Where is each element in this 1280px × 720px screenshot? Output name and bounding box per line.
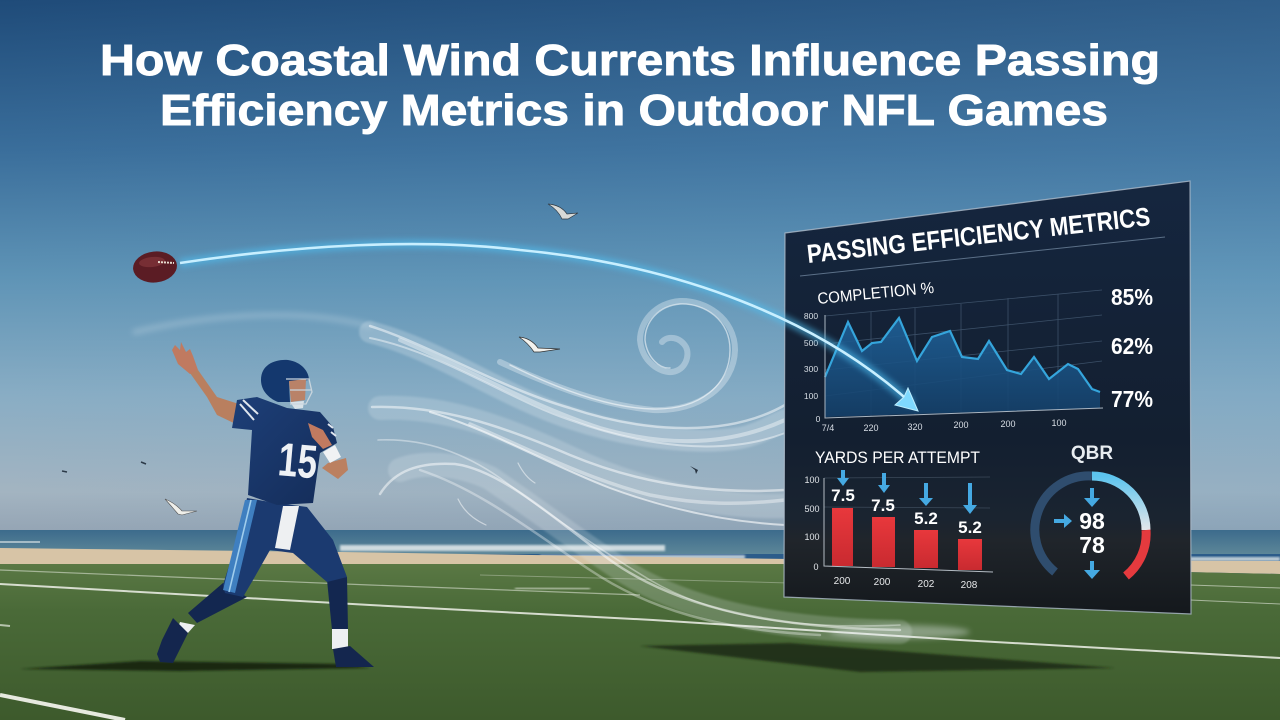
y axis labels: 100: [804, 532, 820, 542]
forearm: [322, 458, 348, 479]
chart gridlines: [825, 290, 1102, 416]
y axis labels: 800: [804, 311, 818, 321]
gauge dark arc: [1035, 476, 1092, 572]
icon: distant bird: [690, 466, 698, 474]
x axis labels: 7/4: [822, 423, 834, 433]
chart axes: [824, 478, 993, 572]
background: grass field with yard lines: [0, 564, 1280, 720]
panel divider: [800, 237, 1165, 276]
y axis labels: [804, 475, 820, 572]
wind stream 2: [372, 407, 785, 525]
chart title: COMPLETION %: [817, 280, 935, 308]
y axis labels: 100: [804, 391, 818, 401]
torso jersey: [232, 397, 337, 505]
icon: distant bird dots: [62, 462, 146, 472]
shoe left: [157, 618, 188, 663]
completion values: 85%: [1111, 284, 1153, 310]
gauge light arc: [1092, 476, 1146, 530]
completion values: [1111, 284, 1153, 412]
bar values: 7.5: [831, 486, 855, 505]
y axis labels: 100: [804, 475, 820, 485]
trajectory arrow: [180, 244, 918, 411]
birds: [62, 204, 698, 515]
background: ocean: [0, 530, 1280, 561]
front leg: [327, 577, 348, 630]
y axis labels: 300: [804, 364, 818, 374]
icon: gauge arrows: [1054, 488, 1100, 579]
player shadow on field: [20, 661, 370, 671]
completion values: 62%: [1111, 333, 1153, 359]
x axis labels: 200: [874, 577, 891, 588]
x axis labels: 200: [953, 420, 969, 430]
sock right: [332, 629, 348, 649]
panel background: [784, 181, 1191, 614]
chart area: [825, 318, 1100, 417]
bar values: 5.2: [914, 509, 938, 528]
wind currents: [135, 301, 970, 639]
chart title: YARDS PER ATTEMPT: [815, 448, 980, 467]
gauge title: QBR: [1071, 443, 1113, 464]
icon: football: [132, 249, 178, 285]
gauge values: 98: [1079, 508, 1105, 534]
gauge values: 78: [1079, 532, 1105, 558]
bar values: 7.5: [871, 496, 895, 515]
y axis labels: 500: [804, 338, 818, 348]
y axis labels: 500: [804, 504, 820, 514]
x axis labels: 200: [834, 576, 851, 587]
hand: [172, 342, 198, 374]
wind stream 3: [378, 440, 970, 639]
helmet: [261, 360, 309, 402]
chin strap: [290, 401, 304, 409]
completion values: 77%: [1111, 386, 1153, 412]
x axis labels: 202: [918, 579, 935, 590]
gauge values: [1079, 508, 1105, 558]
x axis labels: [834, 576, 978, 591]
background: beach: [0, 548, 1280, 574]
pants: [223, 498, 347, 597]
hand on chest: [308, 423, 332, 449]
face mask: [286, 379, 312, 404]
wind stream 1: [135, 315, 785, 446]
chart: yards per attempt: [804, 448, 993, 591]
title: [100, 36, 1160, 135]
towel: [275, 506, 299, 550]
title: How Coastal Wind Currents Influence Passing: [100, 36, 1160, 85]
x axis labels: 320: [907, 422, 923, 432]
arrow head: [895, 388, 918, 411]
chart gridlines: [824, 477, 990, 508]
player: quarterback number 15: [157, 342, 374, 667]
face: [289, 379, 306, 402]
sock left: [178, 622, 195, 634]
chart line: [825, 318, 1100, 392]
wind spiral: [500, 301, 735, 410]
y axis labels: [804, 311, 821, 424]
bar values: [831, 486, 982, 537]
shoe right: [333, 646, 374, 667]
chart: completion percentage: [804, 280, 1153, 433]
bar values: 5.2: [958, 518, 982, 537]
bars: [832, 508, 982, 570]
back leg: [188, 583, 247, 623]
icon: seagull lower left: [165, 499, 197, 515]
x axis labels: 220: [863, 423, 879, 433]
title: Efficiency Metrics in Outdoor NFL Games: [160, 86, 1108, 135]
x axis labels: 200: [1000, 419, 1016, 429]
x axis labels: 208: [961, 580, 978, 591]
panel heading: PASSING EFFICIENCY METRICS: [805, 201, 1152, 269]
panel: passing efficiency metrics: [784, 181, 1191, 614]
x axis labels: [822, 418, 1067, 433]
icon: seagull top: [548, 204, 578, 219]
chart axes: [825, 315, 1103, 418]
y axis labels: 0: [816, 414, 821, 424]
raised throwing arm: [190, 370, 242, 427]
jersey number: 15: [276, 432, 320, 488]
y axis labels: 0: [813, 562, 819, 572]
gauge red arc: [1126, 530, 1146, 576]
wristband: [323, 445, 341, 463]
icon: down arrows over bars: [837, 470, 977, 514]
chart: QBR gauge: [1035, 443, 1146, 579]
background: sky: [0, 0, 1280, 535]
x axis labels: 100: [1051, 418, 1067, 428]
pants stripe: [223, 500, 257, 593]
sleeve stripes: [240, 400, 336, 436]
panel shadow on field: [640, 643, 1115, 672]
icon: seagull middle: [519, 337, 560, 352]
